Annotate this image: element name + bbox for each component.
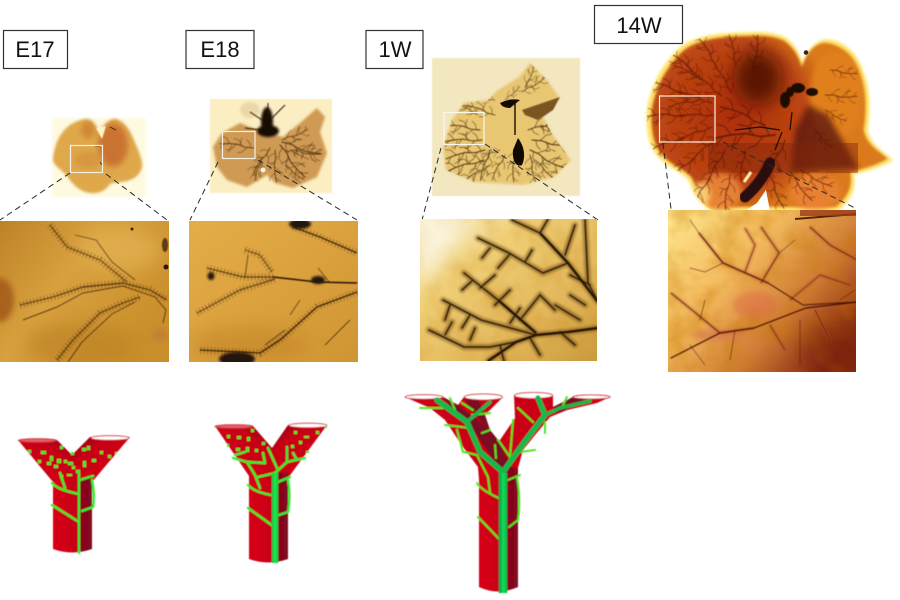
model: E18 vessel tree (215, 423, 327, 563)
photo: E18 whole lobe (210, 99, 332, 193)
label: E17 (4, 30, 68, 68)
micrograph: 14W (668, 210, 856, 372)
right arm of vessel (66, 437, 130, 482)
micrograph: 1W (420, 219, 598, 365)
trunk of vessel (53, 478, 92, 552)
vessel openings (18, 436, 129, 442)
photo: 14W whole liver (643, 32, 892, 212)
photo: 1W whole lobe (432, 58, 580, 196)
zoom box: 14W (660, 96, 715, 142)
dashed zoom guides (0, 142, 857, 220)
trunk of vessel (249, 473, 288, 562)
model: 1W vessel tree (405, 392, 610, 593)
zoom box: 1W (444, 112, 484, 144)
photo: E17 whole lobe (52, 118, 146, 197)
endothelial dots (227, 426, 327, 453)
zoom box: E18 (222, 132, 255, 158)
vessel shading (443, 397, 588, 470)
left arm of vessel (215, 426, 278, 480)
label: 14W (594, 6, 682, 44)
vessel openings (405, 392, 610, 400)
right arm of vessel (262, 425, 327, 478)
zoom box: E17 (70, 146, 102, 172)
micrograph: E18 (189, 219, 358, 366)
endothelial network green (233, 447, 305, 563)
trunk of vessel (479, 468, 518, 592)
model: E17 vessel tree (18, 436, 130, 553)
label: 14W: 14W (616, 13, 662, 38)
label: 1W: 1W (378, 37, 412, 62)
label: E17: E17 (15, 37, 55, 62)
left arm of vessel (18, 440, 80, 485)
micrograph: E17 (0, 221, 169, 367)
label: E18: E18 (200, 37, 240, 62)
endothelial thin branches (420, 397, 567, 543)
vessel body (405, 395, 610, 480)
vessel openings (215, 423, 327, 428)
label: 1W (366, 30, 423, 68)
endothelial dots (28, 446, 117, 478)
label: E18 (186, 30, 254, 68)
endothelial main branches (437, 398, 590, 593)
endothelial network green (52, 473, 94, 553)
